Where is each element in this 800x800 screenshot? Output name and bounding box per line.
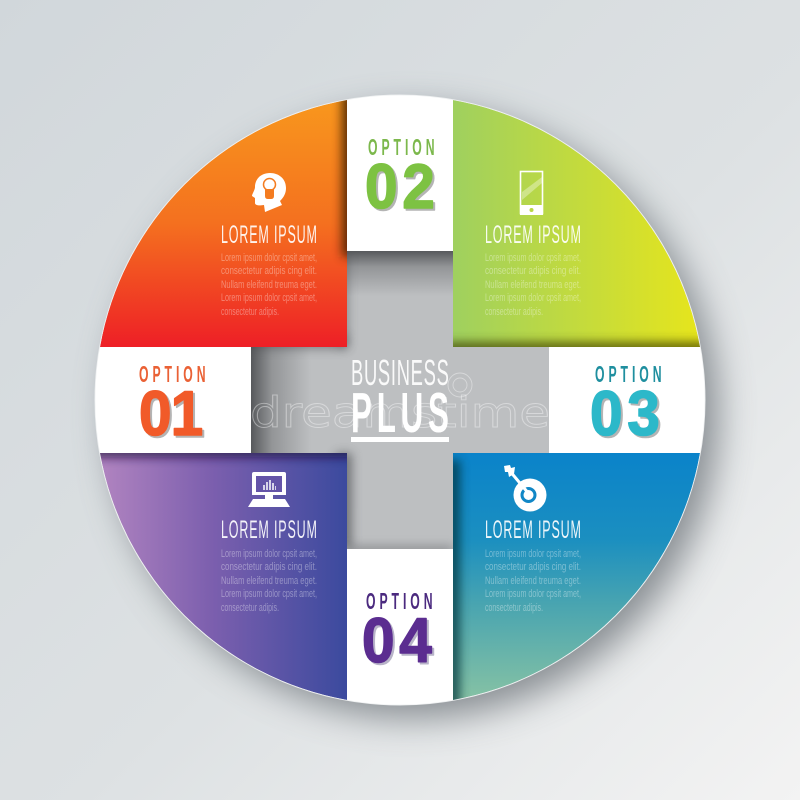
body text	[485, 548, 581, 614]
body text	[485, 252, 581, 318]
body text: Lorem ipsum dolor cpsit amet,	[221, 588, 317, 600]
body text: consectetur adipis.	[221, 602, 279, 614]
label: option 01: OPTION	[139, 361, 210, 387]
number: 02: 02	[365, 151, 439, 221]
body text	[221, 548, 317, 614]
icon: head with light bulb	[252, 173, 286, 212]
body text: consectetur adipis cing elit.	[485, 561, 581, 573]
icon: dart target	[504, 465, 546, 512]
number: 02: 02	[367, 153, 441, 223]
icon: computer monitor	[248, 472, 290, 507]
body text	[221, 252, 317, 318]
circle drop shadow	[110, 110, 718, 718]
body text: Nullam eleifend treuma eget.	[485, 575, 581, 587]
circle base	[94, 94, 706, 706]
body text: Lorem ipsum dolor cpsit amet,	[485, 548, 581, 560]
body text: Nullam eleifend treuma eget.	[221, 279, 317, 291]
body text: Lorem ipsum dolor cpsit amet,	[485, 252, 581, 264]
body text: Lorem ipsum dolor cpsit amet,	[485, 292, 581, 304]
panel: option 03 tab	[549, 347, 705, 453]
number: 03: 03	[590, 378, 664, 448]
body text: Nullam eleifend treuma eget.	[485, 279, 581, 291]
body text: Lorem ipsum dolor cpsit amet,	[485, 588, 581, 600]
panel: option 01 tab	[95, 347, 251, 453]
panel: option 04 tab	[347, 549, 453, 705]
panel: quadrant top-right	[445, 100, 710, 354]
heading: lorem ipsum: LOREM IPSUM	[221, 516, 318, 544]
body text: consectetur adipis.	[221, 306, 279, 318]
panel: quadrant bottom-left	[90, 447, 355, 700]
label: option 02: OPTION	[368, 134, 439, 160]
watermark: dreamstime	[250, 388, 550, 437]
number: 03: 03	[592, 380, 666, 450]
heading: lorem ipsum: LOREM IPSUM	[221, 221, 318, 249]
number: 04: 04	[362, 605, 436, 675]
body text: Lorem ipsum dolor cpsit amet,	[221, 548, 317, 560]
body text: consectetur adipis cing elit.	[221, 561, 317, 573]
heading: lorem ipsum: LOREM IPSUM	[485, 516, 582, 544]
title: business plus: BUSINESS	[351, 354, 450, 394]
body text: Lorem ipsum dolor cpsit amet,	[221, 252, 317, 264]
body text: consectetur adipis.	[485, 602, 543, 614]
body text: consectetur adipis cing elit.	[221, 265, 317, 277]
body text: Nullam eleifend treuma eget.	[221, 575, 317, 587]
body text: consectetur adipis.	[485, 306, 543, 318]
body text: consectetur adipis cing elit.	[485, 265, 581, 277]
number: 01: 01	[141, 380, 204, 450]
number: 04: 04	[364, 607, 438, 677]
body text: Lorem ipsum dolor cpsit amet,	[221, 292, 317, 304]
label: option 03: OPTION	[595, 361, 666, 387]
number: 01: 01	[139, 378, 202, 448]
heading: lorem ipsum: LOREM IPSUM	[485, 221, 582, 249]
panel: quadrant bottom-right	[446, 453, 700, 710]
label: option 04: OPTION	[366, 588, 437, 614]
panel: option 02 tab	[347, 95, 453, 251]
panel: quadrant top-left	[100, 92, 356, 347]
watermark	[250, 373, 550, 437]
title: business plus: PLUS	[351, 380, 454, 444]
central cross	[251, 251, 549, 549]
icon: smartphone	[520, 172, 543, 215]
